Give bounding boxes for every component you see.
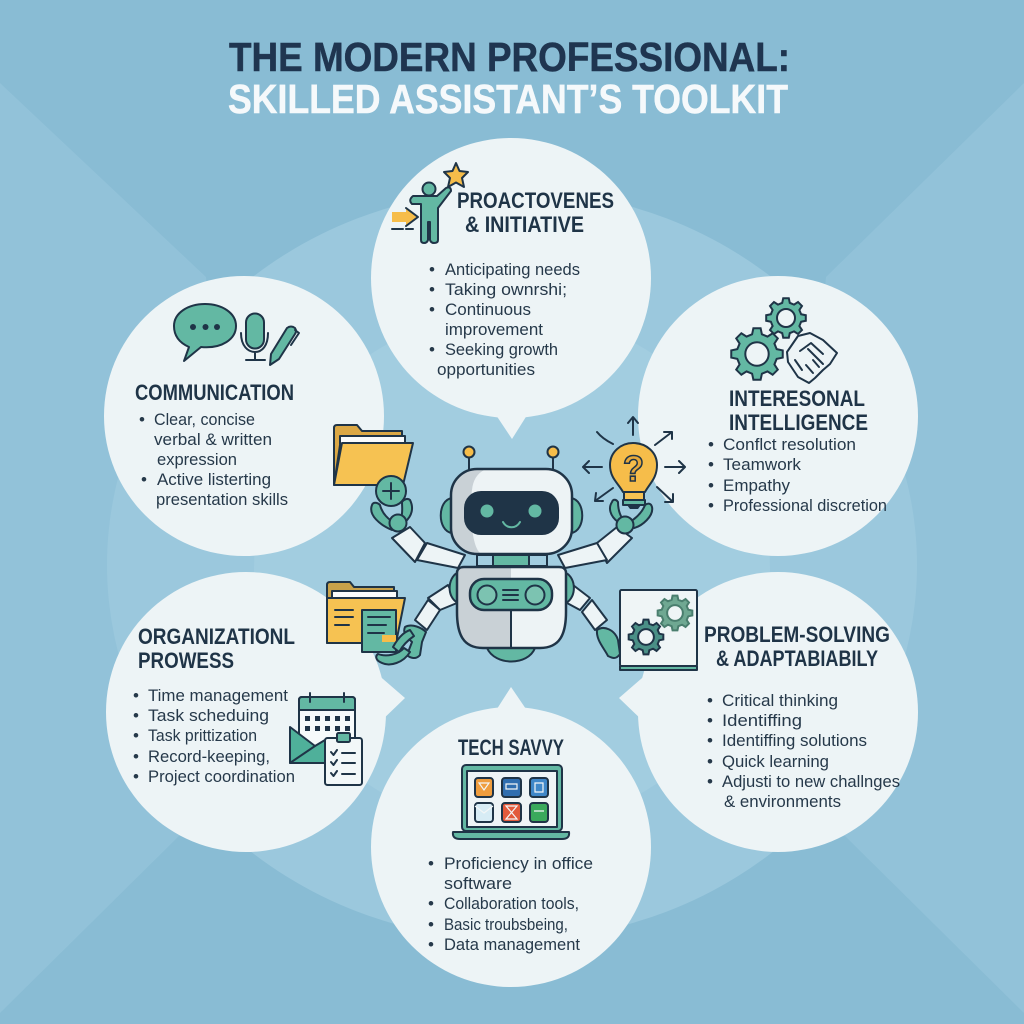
bullet list: Professional discretion (723, 496, 887, 515)
bullet list: Critical thinking (722, 691, 838, 710)
robot antennas and ears (441, 446, 582, 566)
heading (138, 624, 295, 673)
bullet list: • (133, 747, 139, 766)
bullet list: • (428, 854, 434, 873)
bullet list: Record-keeping, (148, 747, 270, 766)
panel: problem-solving and adaptability (619, 572, 918, 852)
bullet list: Conflct resolution (723, 435, 856, 454)
bullet list: improvement (445, 320, 543, 339)
panel: proactiveness and initiative (371, 138, 651, 439)
panel: organizational prowess (106, 572, 405, 852)
heading: ORGANIZATIONL (138, 624, 295, 649)
bullet list: • (133, 686, 139, 705)
robot hands (371, 499, 652, 664)
bullet list: Basic troubsbeing, (444, 915, 568, 934)
bullet list: Task scheduing (148, 706, 269, 725)
heading: COMMUNICATION (135, 380, 294, 405)
heading (457, 188, 614, 237)
heading: PROBLEM-SOLVING (704, 622, 890, 647)
illustration: robot (371, 446, 652, 664)
bullet list (139, 410, 288, 509)
bullet list: expression (157, 450, 237, 469)
bullet list: Seeking growth (445, 340, 558, 359)
bullet list (133, 686, 295, 786)
heading: TECH SAVVY (458, 735, 564, 760)
panel: communication (104, 276, 384, 556)
bullet list (428, 854, 593, 954)
bullet list: • (428, 894, 434, 913)
bullet list: • (141, 470, 147, 489)
bullet list: Data management (444, 935, 580, 954)
bullet list: • (707, 711, 713, 730)
heading (729, 386, 868, 435)
bullet list: Time management (148, 686, 288, 705)
bullet list: • (707, 752, 713, 771)
bullet list: Task prittization (148, 726, 257, 745)
robot torso (450, 567, 574, 662)
heading: INTELLIGENCE (729, 410, 868, 435)
bullet list: • (429, 260, 435, 279)
panel: tech savvy (371, 687, 651, 987)
bullet list: • (708, 455, 714, 474)
panel: interpersonal intelligence (638, 276, 918, 556)
bullet list: • (707, 772, 713, 791)
bullet list: • (429, 340, 435, 359)
bullet list: • (133, 767, 139, 786)
icon: speech bubble, microphone and pen (174, 304, 299, 365)
bullet list: Taking ownrshi; (445, 280, 567, 299)
bullet list: & environments (724, 792, 841, 811)
bullet list: verbal & written (154, 430, 272, 449)
heading: & ADAPTABIABILY (716, 646, 878, 671)
icon: lightbulb with question mark and rays: ? (623, 448, 644, 489)
heading: PROWESS (138, 648, 234, 673)
bullet list: • (708, 476, 714, 495)
robot arms (392, 527, 632, 630)
icon: laptop with app tiles (453, 765, 569, 839)
bullet list: Adjusti to new challnges (722, 772, 900, 791)
heading: PROACTOVENES (457, 188, 614, 213)
bullet list: • (133, 726, 139, 745)
bullet list: presentation skills (156, 490, 288, 509)
bullet list: Empathy (723, 476, 790, 495)
bullet list (707, 691, 900, 811)
bullet list: Collaboration tools, (444, 894, 579, 913)
bullet list: Identiffing solutions (722, 731, 867, 750)
bullet list: Clear, concise (154, 410, 255, 429)
bullet list: • (708, 496, 714, 515)
bullet list: • (133, 706, 139, 725)
icon: lightbulb with question mark and rays (583, 417, 685, 509)
heading: & INITIATIVE (465, 212, 584, 237)
bullet list: Identiffing (722, 711, 802, 730)
bullet list: • (428, 935, 434, 954)
bullet list: Anticipating needs (445, 260, 580, 279)
bullet list: Proficiency in office (444, 854, 593, 873)
bullet list: • (428, 915, 434, 934)
bullet list: Teamwork (723, 455, 801, 474)
bullet list: opportunities (437, 360, 535, 379)
icon: gears board (620, 590, 697, 670)
bullet list: Active listerting (157, 470, 271, 489)
bullet list: • (429, 280, 435, 299)
bullet list: software (444, 874, 512, 893)
heading: INTERESONAL (729, 386, 865, 411)
icon: folder with document (327, 582, 405, 652)
title: THE MODERN PROFESSIONAL: (229, 34, 790, 80)
heading (704, 622, 890, 671)
bullet list (429, 260, 580, 379)
bullet list: Continuous (445, 300, 531, 319)
icon: gears and handshake (731, 298, 837, 383)
icon: person reaching for star (392, 163, 468, 243)
icon: calendar, envelope and checklist (290, 693, 362, 785)
title: SKILLED ASSISTANT’S TOOLKIT (228, 76, 788, 122)
robot head (451, 469, 572, 554)
bullet list: • (429, 300, 435, 319)
bullet list: • (139, 410, 145, 429)
bullet list: Quick learning (722, 752, 829, 771)
bullet list: • (707, 731, 713, 750)
bullet list (708, 435, 887, 515)
bullet list: • (707, 691, 713, 710)
icon: yellow folder with plus (334, 425, 413, 506)
bullet list: • (708, 435, 714, 454)
title (228, 34, 790, 122)
bullet list: Project coordination (148, 767, 295, 786)
